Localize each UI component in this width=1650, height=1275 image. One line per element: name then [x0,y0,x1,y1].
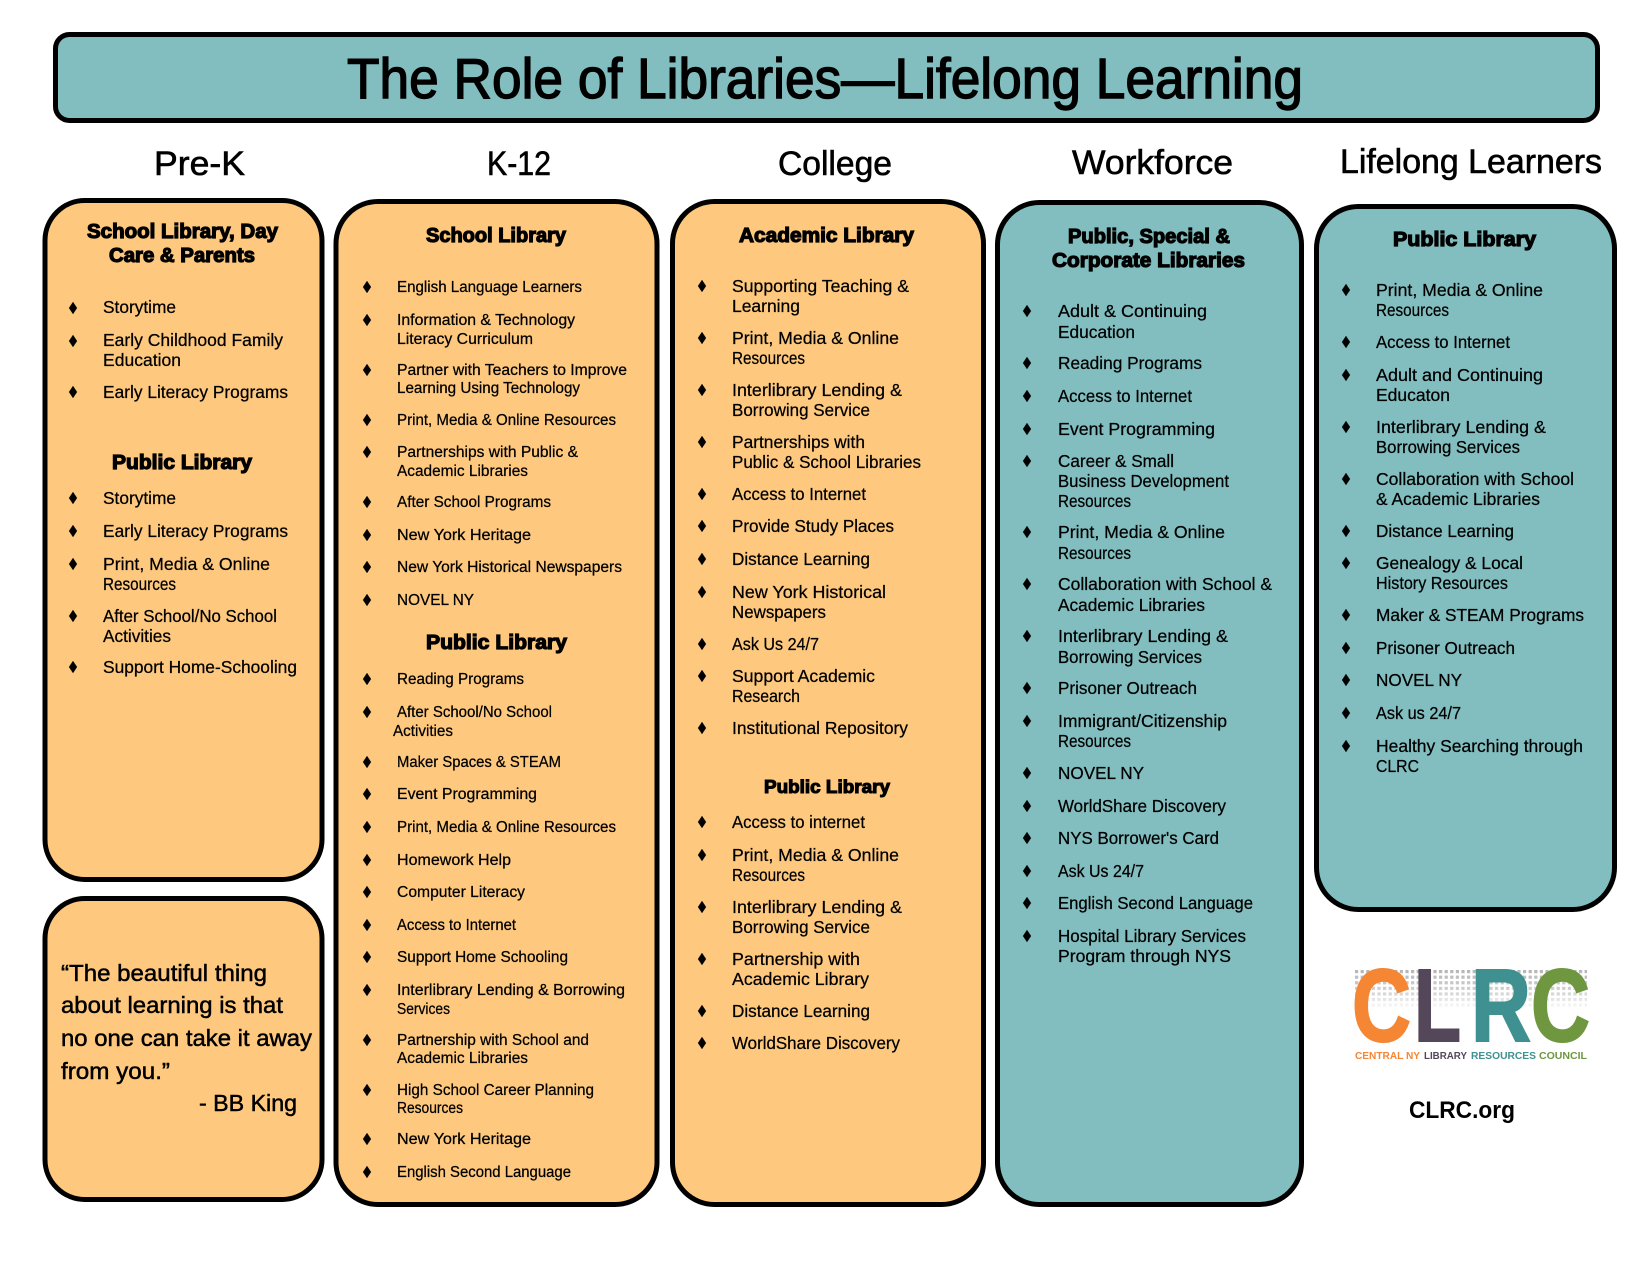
list: workforce library services: WorldShare Discovery [1058,796,1226,816]
list: K-12 public library services: Print, Media & Online Resources [397,819,616,836]
list: lifelong learner library services: Educaton [1376,385,1450,405]
quote text: from you.” [61,1058,170,1084]
list: K-12 school library services: Print, Media & Online Resources [397,412,616,429]
panel: Lifelong Learners [1316,206,1614,910]
list: workforce library services: Academic Libraries [1058,595,1205,615]
panel: quote [45,898,322,1200]
list: workforce library services: Interlibrary Lending & [1058,626,1228,646]
list: Pre-K school library services: Storytime [103,297,176,317]
list: lifelong learner library services: Maker & STEAM Programs [1376,605,1584,625]
list: college public library services: Distance Learning [732,1001,870,1021]
list: K-12 school library services: After School Programs [397,494,551,511]
list: K-12 public library services: Access to Internet [397,917,517,934]
list: workforce library services: Program through NYS [1058,946,1231,966]
heading: College: College [778,145,892,183]
list: workforce library services: NYS Borrower's Card [1058,828,1219,848]
list: workforce library services: Immigrant/Citizenship [1058,711,1227,731]
list: Pre-K public library services: Print, Media & Online [103,554,270,574]
logo: CLRC: C [1352,948,1411,1063]
list: Pre-K public library services: Resources [103,574,176,594]
list: college public library services: Academic Library [732,969,869,989]
list: K-12 public library services: Interlibrary Lending & Borrowing [397,982,625,999]
quote text: “The beautiful thing [61,960,267,986]
list: academic library services: Access to Internet [732,484,866,504]
title: The Role of Libraries—Lifelong Learning [347,47,1303,111]
list: workforce library services: Ask Us 24/7 [1058,861,1144,881]
panel: Workforce [998,202,1302,1204]
list: academic library services: Institutional Repository [732,718,908,738]
list: K-12 school library services: English Language Learners [397,279,582,296]
list: college public library services: Print, Media & Online [732,845,899,865]
list: lifelong learner library services [1342,280,1584,776]
list: lifelong learner library services: Genealogy & Local [1376,553,1523,573]
list: workforce library services: NOVEL NY [1058,763,1144,783]
list: K-12 public library services: Partnership with School and [397,1032,589,1049]
list: Pre-K public library services: Storytime [103,488,176,508]
list: Pre-K public library services: Support Home-Schooling [103,657,297,677]
logo: CLRC: L [1414,948,1461,1063]
list: workforce library services: Borrowing Services [1058,647,1202,667]
list: academic library services: Newspapers [732,602,826,622]
list: K-12 public library services: Support Home Schooling [397,949,568,966]
logo: CLRC [1354,968,1589,1059]
list: academic library services: Partnerships with [732,432,865,452]
list: K-12 school library services: New York Historical Newspapers [397,559,622,576]
logo: CLRC: COUNCIL [1539,1050,1588,1062]
list: workforce library services: Education [1058,322,1135,342]
list: lifelong learner library services: History Resources [1376,573,1508,593]
list: K-12 school library services: Literacy Curriculum [397,331,533,348]
list: K-12 school library services: Partner with Teachers to Improve [397,362,627,379]
list: lifelong learner library services: Collaboration with School [1376,469,1574,489]
list: workforce library services: Adult & Continuing [1058,301,1207,321]
section heading: School Library, Day Care & Parents: Care & Parents [109,245,255,267]
list: Pre-K school library services: Education [103,350,181,370]
list: college public library services: Borrowing Service [732,917,870,937]
section heading: Public Library: Public Library [764,777,890,797]
list: academic library services: Print, Media & Online [732,328,899,348]
list: workforce library services: Prisoner Outreach [1058,678,1197,698]
logo: CLRC: CENTRAL NY [1355,1050,1420,1062]
list: academic library services: Distance Learning [732,549,870,569]
list: lifelong learner library services: Resources [1376,300,1449,320]
list: K-12 public library services: High School Career Planning [397,1082,594,1099]
list: K-12 school library services: New York Heritage [397,527,531,544]
panel: K-12 [336,202,657,1204]
list: lifelong learner library services: CLRC [1376,756,1419,776]
section heading: Public, Special & Corporate Libraries: Corporate Libraries [1052,250,1245,272]
list: K-12 school library services: Information & Technology [397,312,575,329]
list: K-12 public library services: Homework Help [397,852,511,869]
list: K-12 public library services: After School/No School [397,704,552,721]
list: academic library services: Provide Study Places [732,516,894,536]
list: lifelong learner library services: Adult and Continuing [1376,365,1543,385]
list: workforce library services: Print, Media & Online [1058,522,1225,542]
list: academic library services: Learning [732,296,800,316]
list: lifelong learner library services: Access to Internet [1376,332,1510,352]
list: workforce library services: Resources [1058,491,1131,511]
list: workforce library services: Reading Programs [1058,353,1202,373]
logo: CLRC: C [1531,948,1590,1063]
list: K-12 public library services: Activities [393,723,453,740]
list: workforce library services: Access to Internet [1058,386,1192,406]
list: college public library services: Resources [732,865,805,885]
list: lifelong learner library services: Interlibrary Lending & [1376,417,1546,437]
website: CLRC.org: CLRC.org [1409,1097,1515,1124]
list: K-12 public library services: English Second Language [397,1164,571,1181]
list: lifelong learner library services: Borrowing Services [1376,437,1520,457]
list: workforce library services: Hospital Library Services [1058,926,1246,946]
list: K-12 public library services: Reading Programs [397,671,524,688]
list: K-12 school library services: Academic Libraries [397,463,528,480]
section heading: School Library, Day Care & Parents: School Library, Day [87,221,279,243]
quote text: about learning is that [61,992,284,1018]
list: workforce library services: Resources [1058,543,1131,563]
list: K-12 public library services: Resources [397,1100,463,1117]
logo: CLRC: RESOURCES [1471,1050,1536,1062]
quote text: - BB King [199,1090,297,1116]
list: lifelong learner library services: Print, Media & Online [1376,280,1543,300]
list: K-12 school library services: Partnerships with Public & [397,444,579,461]
list: Pre-K public library services: Early Literacy Programs [103,521,288,541]
logo: CLRC: R [1471,948,1531,1063]
list: lifelong learner library services: & Academic Libraries [1376,489,1540,509]
list: workforce library services: Career & Small [1058,451,1174,471]
list: lifelong learner library services: Prisoner Outreach [1376,638,1515,658]
list: Pre-K public library services: Activities [103,626,171,646]
heading: K-12: K-12 [487,145,551,183]
list: college public library services [698,812,902,1053]
list: academic library services: Public & School Libraries [732,452,921,472]
section heading: Public Library: Public Library [1393,229,1537,251]
panel: Pre-K [45,200,322,880]
list: lifelong learner library services: Distance Learning [1376,521,1514,541]
list: academic library services: Interlibrary Lending & [732,380,902,400]
list: workforce library services: Business Development [1058,471,1229,491]
list: academic library services: Support Academic [732,666,875,686]
list: K-12 public library services: Services [397,1001,450,1018]
list: K-12 public library services: New York Heritage [397,1131,531,1148]
list: K-12 public library services: Event Programming [397,786,537,803]
list: Pre-K public library services [69,488,297,677]
list: lifelong learner library services: Ask us 24/7 [1376,703,1461,723]
list: lifelong learner library services: NOVEL NY [1376,670,1462,690]
list: K-12 school library services [363,279,627,609]
list: academic library services: Ask Us 24/7 [732,634,819,654]
list: Pre-K school library services: Early Childhood Family [103,330,283,350]
list: academic library services: Research [732,686,800,706]
list: workforce library services [1023,301,1272,966]
section heading: School Library: School Library [426,225,567,247]
list: academic library services: Borrowing Service [732,400,870,420]
list: college public library services: Access to internet [732,812,865,832]
logo: CLRC: LIBRARY [1424,1050,1467,1062]
list: college public library services: Partnership with [732,949,860,969]
list: workforce library services: Collaboration with School & [1058,574,1272,594]
list: college public library services: WorldShare Discovery [732,1033,900,1053]
list: academic library services: Supporting Teaching & [732,276,909,296]
list: academic library services: Resources [732,348,805,368]
list: Pre-K public library services: After School/No School [103,606,277,626]
list: Pre-K school library services [69,297,288,402]
title banner [56,34,1598,120]
list: K-12 public library services [363,671,625,1181]
heading: Pre-K: Pre-K [154,145,245,183]
list: K-12 public library services: Academic Libraries [397,1050,528,1067]
list: K-12 school library services: NOVEL NY [397,592,474,609]
heading: Workforce: Workforce [1072,144,1233,182]
list: workforce library services: Event Programming [1058,419,1215,439]
list: K-12 school library services: Learning Using Technology [397,380,580,397]
list: Pre-K school library services: Early Literacy Programs [103,382,288,402]
section heading: Academic Library: Academic Library [739,225,915,247]
list: academic library services: New York Historical [732,582,886,602]
panel: College [672,202,984,1204]
section heading: School Library, Day Care & Parents [87,221,279,267]
list: academic library services [698,276,921,738]
section heading: Public, Special & Corporate Libraries: Public, Special & [1068,226,1230,248]
list: workforce library services: Resources [1058,731,1131,751]
list: K-12 public library services: Maker Spaces & STEAM [397,754,561,771]
list: lifelong learner library services: Healthy Searching through [1376,736,1583,756]
list: college public library services: Interlibrary Lending & [732,897,902,917]
heading: Lifelong Learners: Lifelong Learners [1340,143,1602,181]
section heading: Public Library: Public Library [112,452,253,474]
section heading: Public Library: Public Library [426,632,568,654]
quote text [61,960,313,1116]
section heading: Public, Special & Corporate Libraries [1052,226,1245,272]
quote text: no one can take it away [61,1025,313,1051]
list: workforce library services: English Second Language [1058,893,1253,913]
list: K-12 public library services: Computer Literacy [397,884,525,901]
